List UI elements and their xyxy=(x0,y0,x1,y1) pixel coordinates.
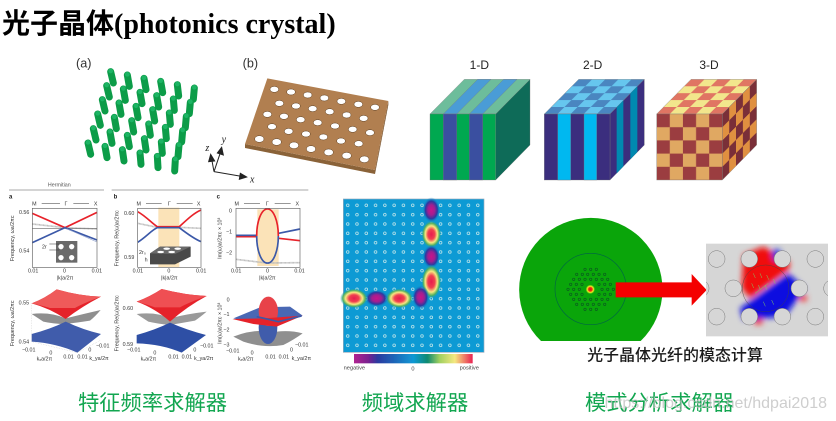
panel: 1-D 2-D 3-D photonic crystals xyxy=(430,58,757,180)
arrow: red xyxy=(616,274,707,306)
chart b: band diagram: 0 xyxy=(167,269,170,275)
chart c: 3D surfaces: −2 xyxy=(223,327,229,333)
chart b: band diagram: 0.01 xyxy=(133,269,143,275)
field hot spots xyxy=(340,197,441,309)
chart b: band diagram: |k|a/2π xyxy=(161,276,178,282)
chart c: band diagram: 0 xyxy=(266,269,269,275)
chart c: 3D surfaces: −1 xyxy=(223,312,229,318)
chart a: band diagram: 0.01 xyxy=(28,269,38,275)
chart c: band diagram xyxy=(217,201,305,282)
2-D cube xyxy=(544,58,644,180)
chart a: 3D surfaces: −0.01 xyxy=(96,343,110,349)
chart headers: Hermitian xyxy=(48,183,71,189)
chart headers: c xyxy=(217,194,221,200)
chart c: band diagram: Im(ω)a/2πc × 10³ xyxy=(217,218,223,259)
chart b: 3D surfaces xyxy=(115,289,214,363)
chart a: band diagram: 0.56 xyxy=(19,210,29,216)
chart a: band diagram: 2r xyxy=(42,244,47,250)
chart a: band diagram: Frequency, ωa/2πc xyxy=(10,215,16,261)
chart c: 3D surfaces: 0.01 xyxy=(265,354,276,360)
chart a: band diagram xyxy=(10,201,102,282)
label: eigenfrequency solver: 特征频率求解器 xyxy=(78,386,227,417)
label: frequency domain solver: 频域求解器 xyxy=(362,386,468,417)
chart a: band diagram: 0.54 xyxy=(19,249,29,255)
label (a): (a) xyxy=(76,57,91,71)
chart b: band diagram: 0.01 xyxy=(196,269,206,275)
panel: photonic crystal fibre mode xyxy=(519,218,836,365)
chart c: 3D surfaces: Im(ω)a/2πc × 10³ xyxy=(217,303,223,344)
chart c: 3D surfaces: 0.01 xyxy=(279,354,289,360)
xyz axes: z xyxy=(204,143,209,154)
chart b: band diagram: Γ xyxy=(168,201,171,207)
chart c: 3D surfaces: −0.01 xyxy=(295,343,309,349)
panel: lattice structures (a) and (b) xyxy=(76,57,388,185)
chart b: band diagram: M xyxy=(136,201,141,207)
chart headers: a xyxy=(9,194,13,200)
chart c: 3D surfaces: −0.01 xyxy=(226,349,240,355)
chart a: band diagram: 0.01 xyxy=(92,269,102,275)
chart c: 3D surfaces xyxy=(217,297,311,363)
chart a: band diagram: |k|a/2π xyxy=(57,276,74,282)
chart c: band diagram: −2 xyxy=(226,251,232,257)
colour bar: positive xyxy=(460,366,479,372)
panel: frequency-domain field map xyxy=(340,197,484,372)
label (b): (b) xyxy=(243,57,258,71)
chart a: 3D surfaces: 0 xyxy=(49,350,52,356)
colour bar xyxy=(344,354,479,372)
chart b: 3D surfaces: 0 xyxy=(193,348,196,354)
chart c: band diagram: −1 xyxy=(226,229,232,235)
chart a: 3D surfaces: 0.01 xyxy=(77,354,88,360)
label: mode analysis solver: 模式分析求解器 xyxy=(585,386,734,417)
chart headers xyxy=(9,183,308,200)
chart c: 3D surfaces: k_ya/2π xyxy=(292,356,311,362)
chart a: band diagram: Γ xyxy=(65,201,68,207)
chart a: 3D surfaces: kₓa/2π xyxy=(37,357,52,363)
title: 光子晶体(photonics crystal) xyxy=(2,2,336,42)
chart b: band diagram: 0.59 xyxy=(124,255,134,261)
chart b: 3D surfaces: kₓa/2π xyxy=(141,357,156,363)
chart b: 3D surfaces: 0.01 xyxy=(168,354,179,360)
chart b: 3D surfaces: 0.60 xyxy=(123,306,133,312)
chart c: 3D surfaces: 0 xyxy=(227,297,230,303)
chart a: 3D surfaces: 0.54 xyxy=(19,339,29,345)
xyz axes: x xyxy=(249,174,255,185)
chart c: 3D surfaces: 0 xyxy=(251,350,254,356)
chart c: 3D surfaces: −3 xyxy=(223,343,229,349)
chart headers: b xyxy=(114,194,118,200)
perforated slab xyxy=(245,78,388,174)
2-D cube: 2-D xyxy=(583,58,603,72)
chart c: band diagram: 0 xyxy=(229,209,232,215)
chart b: band diagram: 0.60 xyxy=(124,211,134,217)
chart b: 3D surfaces: −0.01 xyxy=(127,347,141,353)
watermark: https://blog.csdn.net/hdpai2018 xyxy=(605,395,827,412)
chart b: 3D surfaces: 0.59 xyxy=(123,342,133,348)
chart b: 3D surfaces: −0.01 xyxy=(200,343,214,349)
chart c: band diagram: 0.01 xyxy=(294,269,305,275)
chart c: band diagram: X xyxy=(296,201,300,207)
chart a: band diagram: X xyxy=(94,201,98,207)
chart b: band diagram: Frequency, Re(ω)a/2πc xyxy=(115,210,121,266)
1-D cube: 1-D xyxy=(470,58,489,72)
chart c: band diagram: |k|a/2π xyxy=(259,276,276,282)
chart a: 3D surfaces: Frequency, ωa/2πc xyxy=(10,300,16,346)
colour bar: 0 xyxy=(411,366,415,372)
3-D cube xyxy=(657,58,757,180)
chart b: band diagram: X xyxy=(197,201,201,207)
panel: eigenfrequency charts xyxy=(9,183,311,363)
xyz axes: y xyxy=(221,134,227,145)
chart a: band diagram: 0 xyxy=(63,269,66,275)
fibre cross-section xyxy=(519,218,662,341)
chart b: 3D surfaces: k_ya/2π xyxy=(194,356,214,362)
chart c: 3D surfaces: 0 xyxy=(290,348,293,354)
chart a: 3D surfaces: k_ya/2π xyxy=(89,356,109,362)
1-D cube xyxy=(430,58,530,180)
chart b: 3D surfaces: 0.01 xyxy=(182,354,192,360)
chart a: 3D surfaces: −0.01 xyxy=(22,347,36,353)
chart c: band diagram: 0.01 xyxy=(231,269,241,275)
xyz axes xyxy=(204,134,255,185)
chart c: 3D surfaces: kₓa/2π xyxy=(238,357,254,363)
chart a: 3D surfaces: 0.01 xyxy=(63,354,74,360)
colour bar: negative xyxy=(344,366,365,372)
fibre caption: 光子晶体光纤的模态计算 xyxy=(587,341,763,365)
chart c: band diagram: M xyxy=(234,201,239,207)
chart a: 3D surfaces: 0 xyxy=(88,348,91,354)
chart b: band diagram: h xyxy=(145,257,148,263)
chart c: band diagram: Γ xyxy=(266,201,269,207)
chart b: band diagram: 2r₀ xyxy=(139,250,146,256)
chart a: 3D surfaces xyxy=(10,289,110,363)
chart b: band diagram xyxy=(115,201,206,282)
chart a: band diagram: M xyxy=(32,201,37,207)
3-D cube: 3-D xyxy=(699,58,719,72)
mode field image xyxy=(692,244,836,336)
chart b: 3D surfaces: 0 xyxy=(153,350,156,356)
field background with hole lattice xyxy=(343,199,484,352)
chart a: 3D surfaces: 0.55 xyxy=(19,301,29,307)
cylinder array xyxy=(88,71,194,171)
chart b: 3D surfaces: Frequency, Re(ω)a/2πc xyxy=(115,295,121,351)
